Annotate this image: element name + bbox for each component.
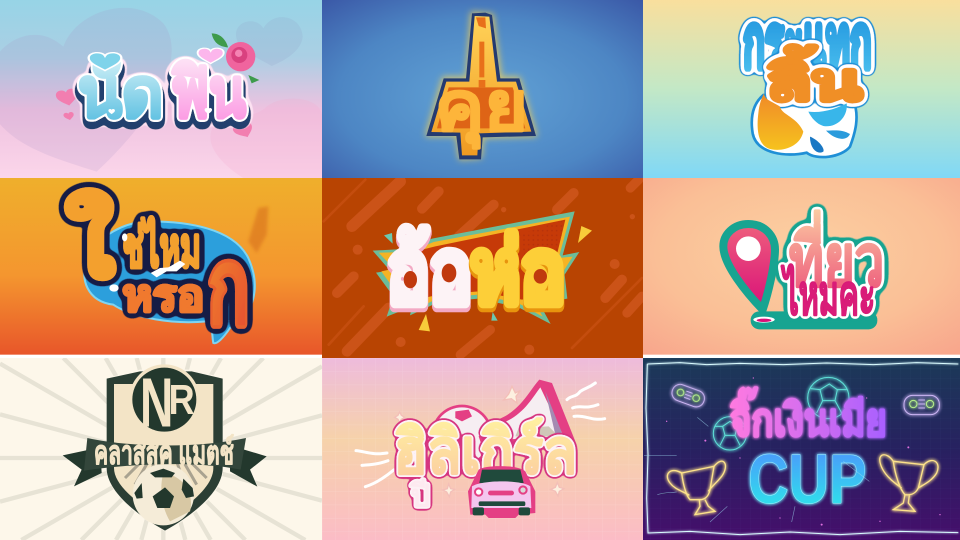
orange drop [758, 93, 803, 150]
icon: football neon top [808, 377, 849, 419]
logo text [78, 56, 246, 132]
stray light streaks [644, 417, 869, 522]
pink peach background [322, 358, 643, 540]
grid [640, 358, 960, 540]
star specks [666, 377, 941, 526]
orange textured background [0, 178, 322, 355]
shield [107, 370, 223, 531]
background dots [353, 207, 635, 355]
CUP neon text: CUP [748, 440, 866, 518]
football [431, 405, 493, 466]
panel: speech bubble logo on orange [0, 178, 322, 355]
panel: neon game cup [640, 358, 960, 540]
panel: talk logo on blue [322, 0, 643, 178]
diagonal streaks [324, 180, 642, 355]
NR emblem: R [169, 376, 195, 423]
sun rays [0, 358, 322, 540]
icon: trophy left [667, 461, 725, 515]
starburst [373, 211, 579, 324]
logo text: ก [207, 229, 249, 346]
spire shape [426, 13, 536, 159]
background stain [248, 206, 268, 253]
ring holes [404, 264, 547, 288]
logo text [65, 189, 249, 346]
icon: hearts around the logo [55, 88, 257, 140]
logo text: ไหมคะ [781, 263, 875, 326]
icon: map pin [723, 224, 775, 323]
icon: football neon left [713, 417, 747, 450]
white dash accents [109, 233, 185, 292]
sparkles [395, 386, 564, 497]
megaphone [492, 380, 575, 445]
grid [322, 358, 643, 540]
panel: travel pin logo on peach [640, 178, 960, 355]
panel: football crest on cream [0, 358, 322, 540]
logo text: ฮิลิเกิร์ล [394, 418, 577, 487]
icon: trophy right [880, 455, 938, 511]
wave lines [356, 383, 605, 487]
pastel gradient background [0, 0, 322, 178]
logo text [394, 418, 577, 513]
faded background hearts [0, 8, 322, 178]
icon: gamepad left [670, 382, 707, 409]
rust background [322, 178, 643, 358]
logo text: ฟิน [171, 56, 246, 132]
icon: rose and leaves [212, 33, 259, 83]
white splash shape [752, 95, 857, 157]
logo text: ใ [65, 189, 115, 297]
icon: water drops [808, 103, 850, 153]
logo text: นัด [78, 56, 163, 132]
logo text: ปี [409, 477, 430, 513]
logo text: คุย [435, 69, 528, 149]
icon: heart accents [89, 48, 224, 114]
blue radial background [322, 0, 643, 178]
triangles [384, 226, 592, 331]
football [133, 464, 194, 525]
top neon text: จิ๊กเงินเมีย [730, 386, 887, 445]
neon frame [646, 363, 958, 535]
yellow text: ห่อ [470, 222, 565, 321]
panel: pink girl logo with car [322, 358, 643, 540]
pink text: อ้อ [387, 222, 472, 321]
logo glow [427, 13, 535, 158]
dark neon background [640, 358, 960, 540]
logo text: ช่ไหม [122, 215, 201, 278]
NR emblem: N [140, 363, 173, 441]
panel: splash logo on mint [640, 0, 960, 178]
panel: starburst logo on rust [322, 178, 643, 358]
logo text: หรอ [122, 273, 204, 321]
icon: pink car [468, 466, 535, 518]
cream background [0, 358, 322, 540]
ribbon: คลาสสิค แมตช์ [94, 433, 234, 472]
logo text [781, 210, 884, 326]
teal base [751, 311, 877, 329]
panel: date logo on pastel hearts [0, 0, 322, 178]
lower text: ลิ้น [766, 45, 861, 110]
logo text: ที่ยว [789, 210, 884, 301]
speech bubble [84, 221, 255, 343]
icon: gamepad right [904, 395, 939, 415]
peach background [640, 178, 960, 355]
ribbon [63, 433, 267, 487]
sky gradient background [640, 0, 960, 178]
